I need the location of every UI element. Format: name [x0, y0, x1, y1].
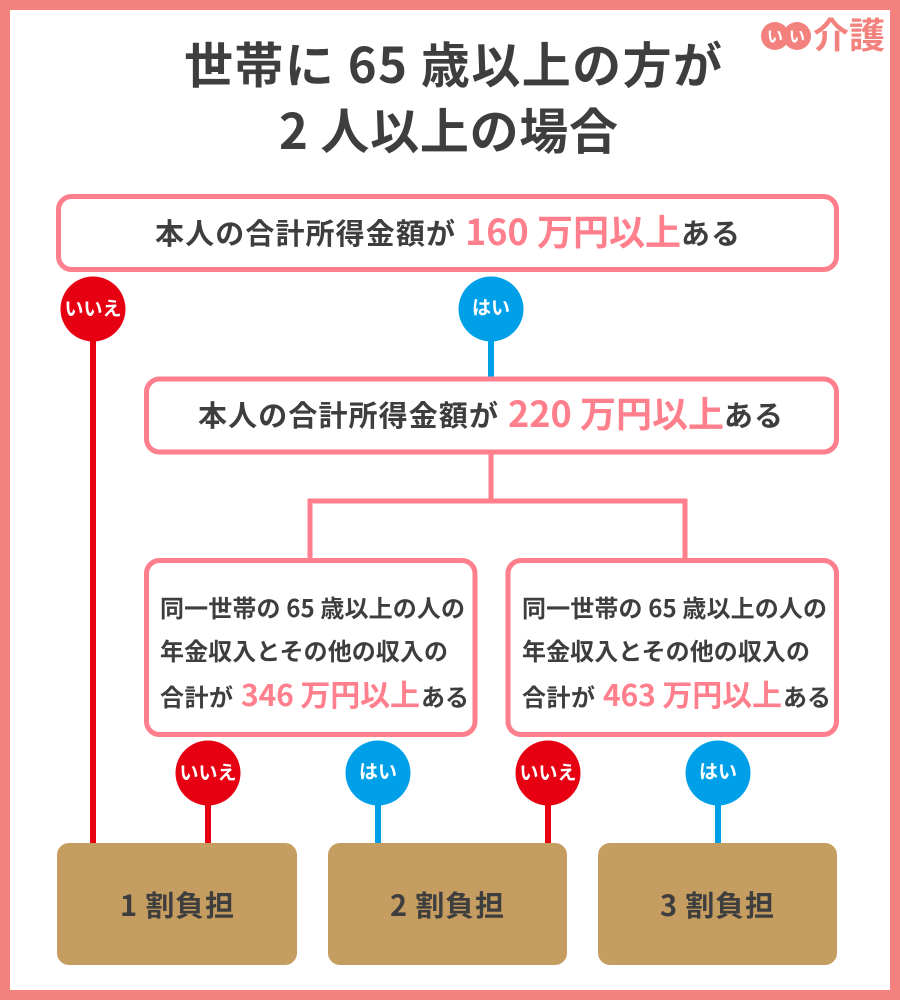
- condition box: 346 万円: 346 万円以上: [241, 671, 420, 715]
- badge: いいえ (346): [176, 740, 240, 806]
- title: 世帯に 65 歳以上の方が: [184, 27, 722, 98]
- condition box: 463 万円: 合計が: [522, 678, 595, 713]
- badge: はい (top): [458, 276, 524, 342]
- condition box: 346 万円: ある: [421, 678, 469, 713]
- condition box: 346 万円: 合計が: [160, 678, 233, 713]
- condition box: 220 万円: [146, 379, 836, 452]
- connector lines: [90, 330, 721, 845]
- condition box: 160 万円: ある: [681, 211, 740, 253]
- title: 2 人以上の場合: [279, 93, 618, 164]
- logo: 介護: [813, 7, 885, 59]
- result: 3割負担: [598, 843, 837, 965]
- condition box: 160 万円: 本人の合計所得金額が: [155, 211, 455, 253]
- badge: はい (346): [346, 740, 410, 806]
- condition box: 346 万円: 同一世帯の 65 歳以上の人の: [160, 589, 465, 624]
- result: 2割負担: [328, 843, 567, 965]
- condition box: 346 万円: 年金収入とその他の収入の: [160, 632, 448, 667]
- condition box: 160 万円: 160 万円以上: [465, 204, 681, 256]
- logo: い: [789, 23, 805, 47]
- badge: いいえ (346): いいえ: [180, 758, 236, 785]
- badge: はい (463): [686, 740, 750, 806]
- logo: [761, 7, 885, 59]
- badge: いいえ (463): いいえ: [520, 758, 576, 785]
- condition box: 463 万円: [508, 560, 836, 734]
- condition box: 463 万円: ある: [783, 678, 831, 713]
- condition box: 160 万円: [58, 196, 836, 270]
- condition box: 463 万円: 年金収入とその他の収入の: [522, 632, 810, 667]
- condition box: 220 万円: 220 万円以上: [508, 386, 724, 438]
- result: 1割負担: 1 割負担: [120, 883, 234, 925]
- result: 2割負担: 2 割負担: [390, 883, 504, 925]
- condition box: 463 万円: 同一世帯の 65 歳以上の人の: [522, 589, 827, 624]
- condition box: 346 万円: [146, 560, 475, 734]
- logo: い: [767, 23, 783, 47]
- badge: いいえ (top): [60, 276, 126, 342]
- condition box: 220 万円: ある: [724, 393, 783, 435]
- condition box: 463 万円: 463 万円以上: [603, 671, 782, 715]
- badge: はい (346): はい: [359, 757, 397, 784]
- badge: はい (463): はい: [699, 757, 737, 784]
- condition box: 220 万円: 本人の合計所得金額が: [198, 393, 498, 435]
- result: 3割負担: 3 割負担: [660, 883, 774, 925]
- badge: はい (top): はい: [472, 293, 510, 320]
- result: 1割負担: [57, 843, 297, 965]
- title: [184, 27, 722, 164]
- badge: いいえ (top): いいえ: [64, 294, 122, 321]
- badge: いいえ (463): [516, 740, 580, 806]
